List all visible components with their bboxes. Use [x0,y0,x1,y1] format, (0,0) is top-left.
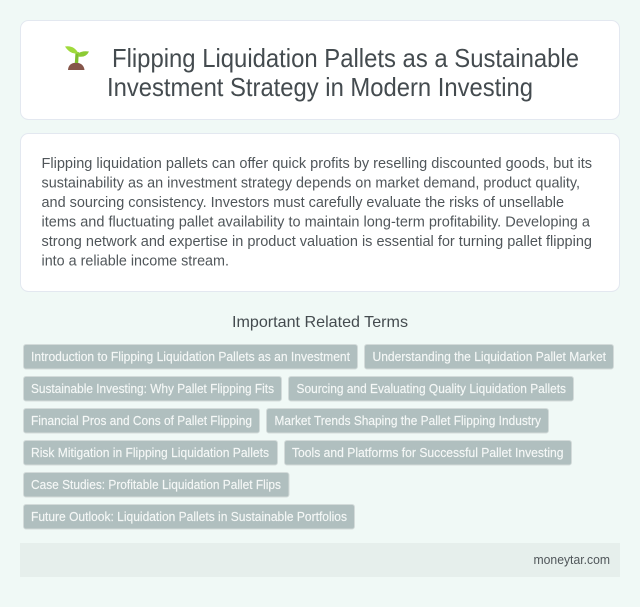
text block: summary: sustainability as an investment strategy depends on market demand, product quality, [42,176,580,192]
text block: summary: and sourcing consistency. Investors must carefully evaluate the risks of unsellable [42,195,564,211]
tag [24,376,282,401]
tag [24,344,358,369]
footer bar [20,543,620,577]
tag: Tools and Platforms for Successful Pallet Investing [292,445,564,460]
heading: related terms: Important Related Terms [232,314,408,331]
tag: Sustainable Investing: Why Pallet Flipping Fits [31,381,274,396]
tag: Future Outlook: Liquidation Pallets in Sustainable Portfolios [31,509,347,524]
title: Flipping Liquidation Pallets as a Sustainable [112,45,579,73]
panel: title card [20,20,620,120]
footer text: source: moneytar.com [534,552,610,567]
tag [24,504,354,529]
text block: summary [42,156,592,270]
tag [24,408,260,433]
tag: Financial Pros and Cons of Pallet Flipping [31,413,252,428]
tag [24,472,289,497]
text block: summary: items and fluctuating pallet availability to maintain long-term profitability. Developing a [42,214,591,230]
title: Investment Strategy in Modern Investing [107,74,533,102]
tag [266,408,548,433]
panel: summary paragraph [20,134,620,292]
tag: Introduction to Flipping Liquidation Pallets as an Investment [31,349,350,364]
title [107,45,579,102]
text block: summary: Flipping liquidation pallets can offer quick profits by reselling discounted goods, but its [42,156,592,172]
tag [284,440,572,465]
icon: seedling [65,46,89,70]
text block: summary: into a reliable income stream. [42,254,229,270]
text block: summary: strong network and expertise in product valuation is essential for turning pallet flipping [42,234,592,250]
tag: Risk Mitigation in Flipping Liquidation Pallets [31,445,269,460]
tag: Market Trends Shaping the Pallet Flipping Industry [274,413,542,428]
tag: Understanding the Liquidation Pallet Market [372,349,606,364]
tag [364,344,614,369]
tag list [24,344,614,529]
tag: Sourcing and Evaluating Quality Liquidation Pallets [296,381,566,396]
tag [288,376,574,401]
tag: Case Studies: Profitable Liquidation Pallet Flips [31,477,281,492]
tag [24,440,278,465]
